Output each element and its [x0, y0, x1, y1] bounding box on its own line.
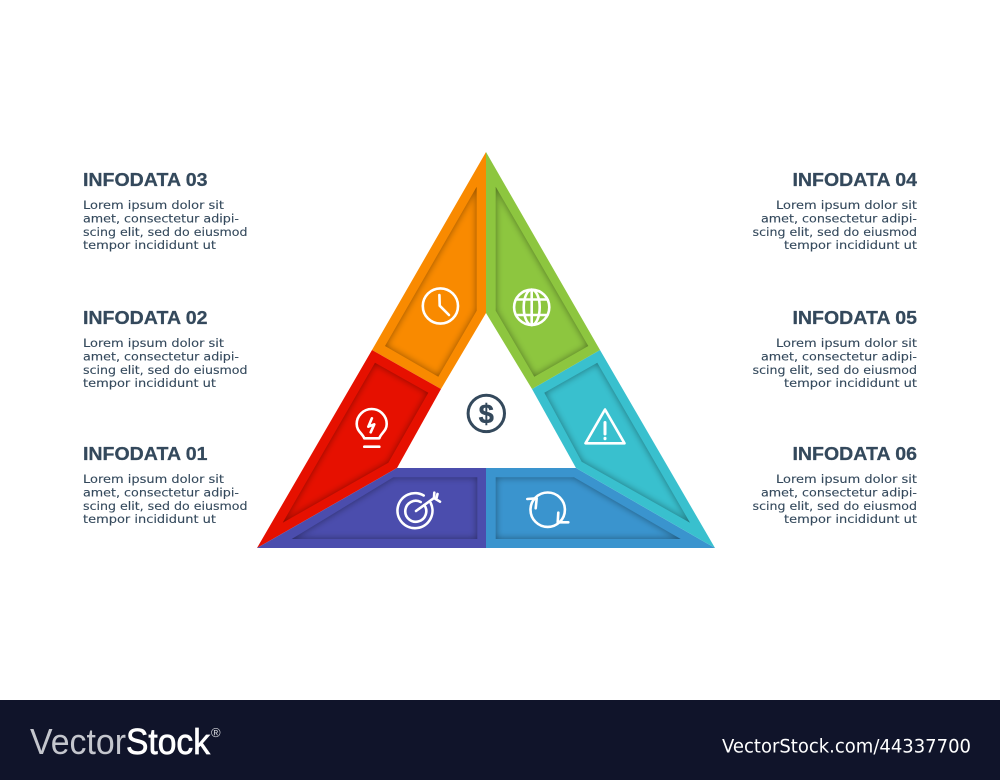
text block: infodata 01: Lorem ipsum dolor sit	[83, 472, 224, 486]
text block: infodata 04	[752, 169, 918, 252]
text block: infodata 03: tempor incididunt ut	[83, 238, 216, 252]
text block: infodata 05: INFODATA 05	[792, 307, 917, 328]
text block: infodata 03	[83, 169, 248, 252]
text block: infodata 01	[83, 443, 248, 526]
text block: infodata 05: Lorem ipsum dolor sit	[776, 336, 917, 350]
icon: central dollar coin	[468, 395, 504, 432]
text block: infodata 03: amet, consectetur adipi-	[83, 211, 239, 225]
panel: orange segment 03	[372, 152, 486, 389]
text block: infodata 03: INFODATA 03	[83, 169, 208, 190]
text block: infodata 06: scing elit, sed do eiusmod	[752, 499, 917, 513]
footer logo: Stock	[126, 721, 211, 762]
footer logo: ®	[211, 725, 221, 740]
text block: infodata 06: Lorem ipsum dolor sit	[776, 472, 917, 486]
text block: infodata 01: tempor incididunt ut	[83, 512, 216, 526]
text block: infodata 06: tempor incididunt ut	[784, 512, 917, 526]
icon: clock	[423, 288, 458, 324]
text block: infodata 05: amet, consectetur adipi-	[761, 349, 917, 363]
text block: infodata 06	[752, 443, 917, 526]
text block: infodata 06: amet, consectetur adipi-	[761, 485, 917, 499]
icon: globe	[514, 290, 549, 325]
footer bar	[0, 700, 1000, 780]
icon: warning triangle	[586, 410, 624, 443]
text block: infodata 05: scing elit, sed do eiusmod	[752, 363, 917, 377]
icon: target	[397, 493, 440, 528]
panel: green segment 04	[486, 152, 600, 389]
text block: infodata 04: amet, consectetur adipi-	[761, 211, 917, 225]
text block: infodata 01: INFODATA 01	[83, 443, 208, 464]
text block: infodata 02: Lorem ipsum dolor sit	[83, 336, 224, 350]
panel: blue segment 06	[486, 468, 715, 548]
text block: infodata 01: scing elit, sed do eiusmod	[83, 499, 248, 513]
text block: infodata 03: Lorem ipsum dolor sit	[83, 198, 224, 212]
footer image id: VectorStock.com/44337700	[722, 737, 971, 758]
panel: red segment 02	[257, 350, 441, 548]
text block: infodata 02	[83, 307, 248, 390]
text block: infodata 01: amet, consectetur adipi-	[83, 485, 239, 499]
text block: infodata 02: amet, consectetur adipi-	[83, 349, 239, 363]
text block: infodata 05	[752, 307, 917, 390]
text block: infodata 04: tempor incididunt ut	[784, 238, 917, 252]
text block: infodata 02: scing elit, sed do eiusmod	[83, 363, 248, 377]
text block: infodata 02: tempor incididunt ut	[83, 376, 216, 390]
panel: teal segment 05	[532, 350, 715, 548]
text block: infodata 04: Lorem ipsum dolor sit	[776, 198, 917, 212]
icon: refresh arrows	[527, 492, 568, 527]
text block: infodata 02: INFODATA 02	[83, 307, 208, 328]
footer logo	[30, 721, 221, 762]
text block: infodata 05: tempor incididunt ut	[784, 376, 917, 390]
icon: light bulb	[357, 409, 387, 447]
text block: infodata 04: scing elit, sed do eiusmod	[752, 225, 917, 239]
panel: purple segment 01	[257, 468, 486, 548]
icon: central dollar coin: $	[479, 399, 494, 429]
text block: infodata 04: INFODATA 04	[792, 169, 918, 190]
text block: infodata 06: INFODATA 06	[792, 443, 917, 464]
text block: infodata 03: scing elit, sed do eiusmod	[83, 225, 248, 239]
footer logo: Vector	[30, 721, 126, 762]
